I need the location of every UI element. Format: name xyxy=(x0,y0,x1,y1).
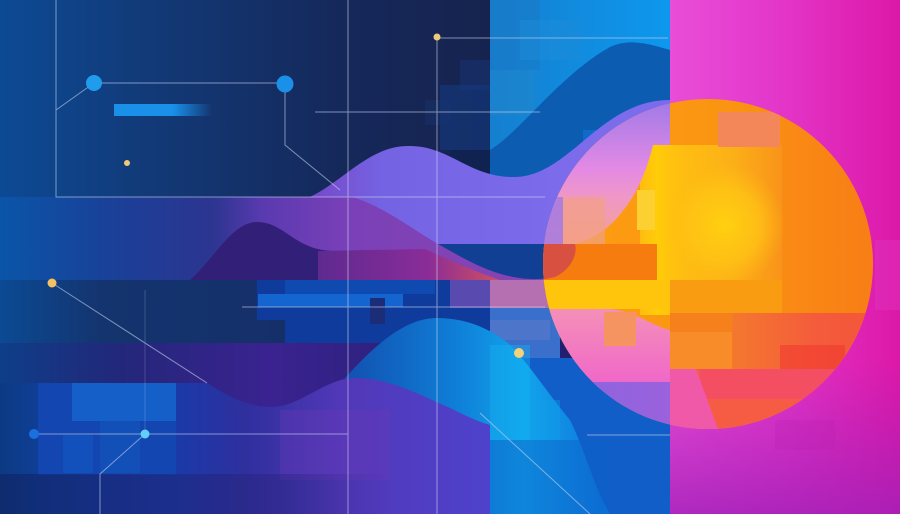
band: magenta purple glow xyxy=(318,249,500,280)
block: bottom dark strip xyxy=(0,474,390,514)
node: small yellow xyxy=(124,160,130,166)
upper left pink lobe xyxy=(540,95,670,244)
orange pale block xyxy=(718,112,780,147)
yellow core xyxy=(640,145,785,315)
pixel blocks: dark blue mosaic xyxy=(425,60,613,180)
circle base orange xyxy=(540,95,880,435)
pixel blocks: cyan glow xyxy=(490,345,610,514)
lower right orange xyxy=(670,313,880,373)
lower pink lobe xyxy=(540,309,670,382)
panel: magenta right field xyxy=(670,0,900,514)
yellow band xyxy=(544,280,640,309)
pixel blocks: central blue mosaic xyxy=(257,280,560,358)
blob edge over band xyxy=(540,244,576,280)
pixel blocks: lower left blue mosaic xyxy=(38,383,176,475)
node: lower cyan xyxy=(140,430,150,438)
orange band xyxy=(540,244,657,280)
pale yellow block xyxy=(637,190,655,230)
wave: dark navy blob xyxy=(438,244,575,279)
orange mid block xyxy=(670,332,732,369)
coral pink strip xyxy=(700,369,835,399)
node: left yellow xyxy=(48,278,56,288)
orange under core xyxy=(670,280,782,313)
red lower block xyxy=(732,313,866,374)
lower coral wedge xyxy=(670,369,832,429)
wave: lower bright blue xyxy=(345,318,610,514)
pink wedge lower xyxy=(670,369,718,429)
node: mid yellow xyxy=(514,348,524,358)
node: large blue left xyxy=(86,75,102,91)
panel: bright blue column xyxy=(490,0,670,197)
wave: lower violet body xyxy=(0,378,490,514)
wave: dark purple crest xyxy=(190,222,490,280)
sun: orange circle xyxy=(540,95,880,440)
node: top yellow xyxy=(434,34,440,40)
panel: background bands xyxy=(0,0,670,410)
bar: fading blue highlight xyxy=(114,104,212,116)
lower violet lobe xyxy=(592,382,670,424)
salmon blocks xyxy=(543,197,605,244)
orange tile in pink xyxy=(604,312,636,346)
red hot tile xyxy=(780,345,845,369)
wave: right deep blue field xyxy=(490,358,670,514)
block: purple tint xyxy=(280,410,390,480)
wave: upper deep blue xyxy=(490,42,670,197)
node: lower blue xyxy=(29,429,39,439)
lines: thin grid and connectors xyxy=(34,0,670,514)
wave: lavender upper ribbon xyxy=(310,100,670,280)
node: large blue right xyxy=(276,76,294,92)
